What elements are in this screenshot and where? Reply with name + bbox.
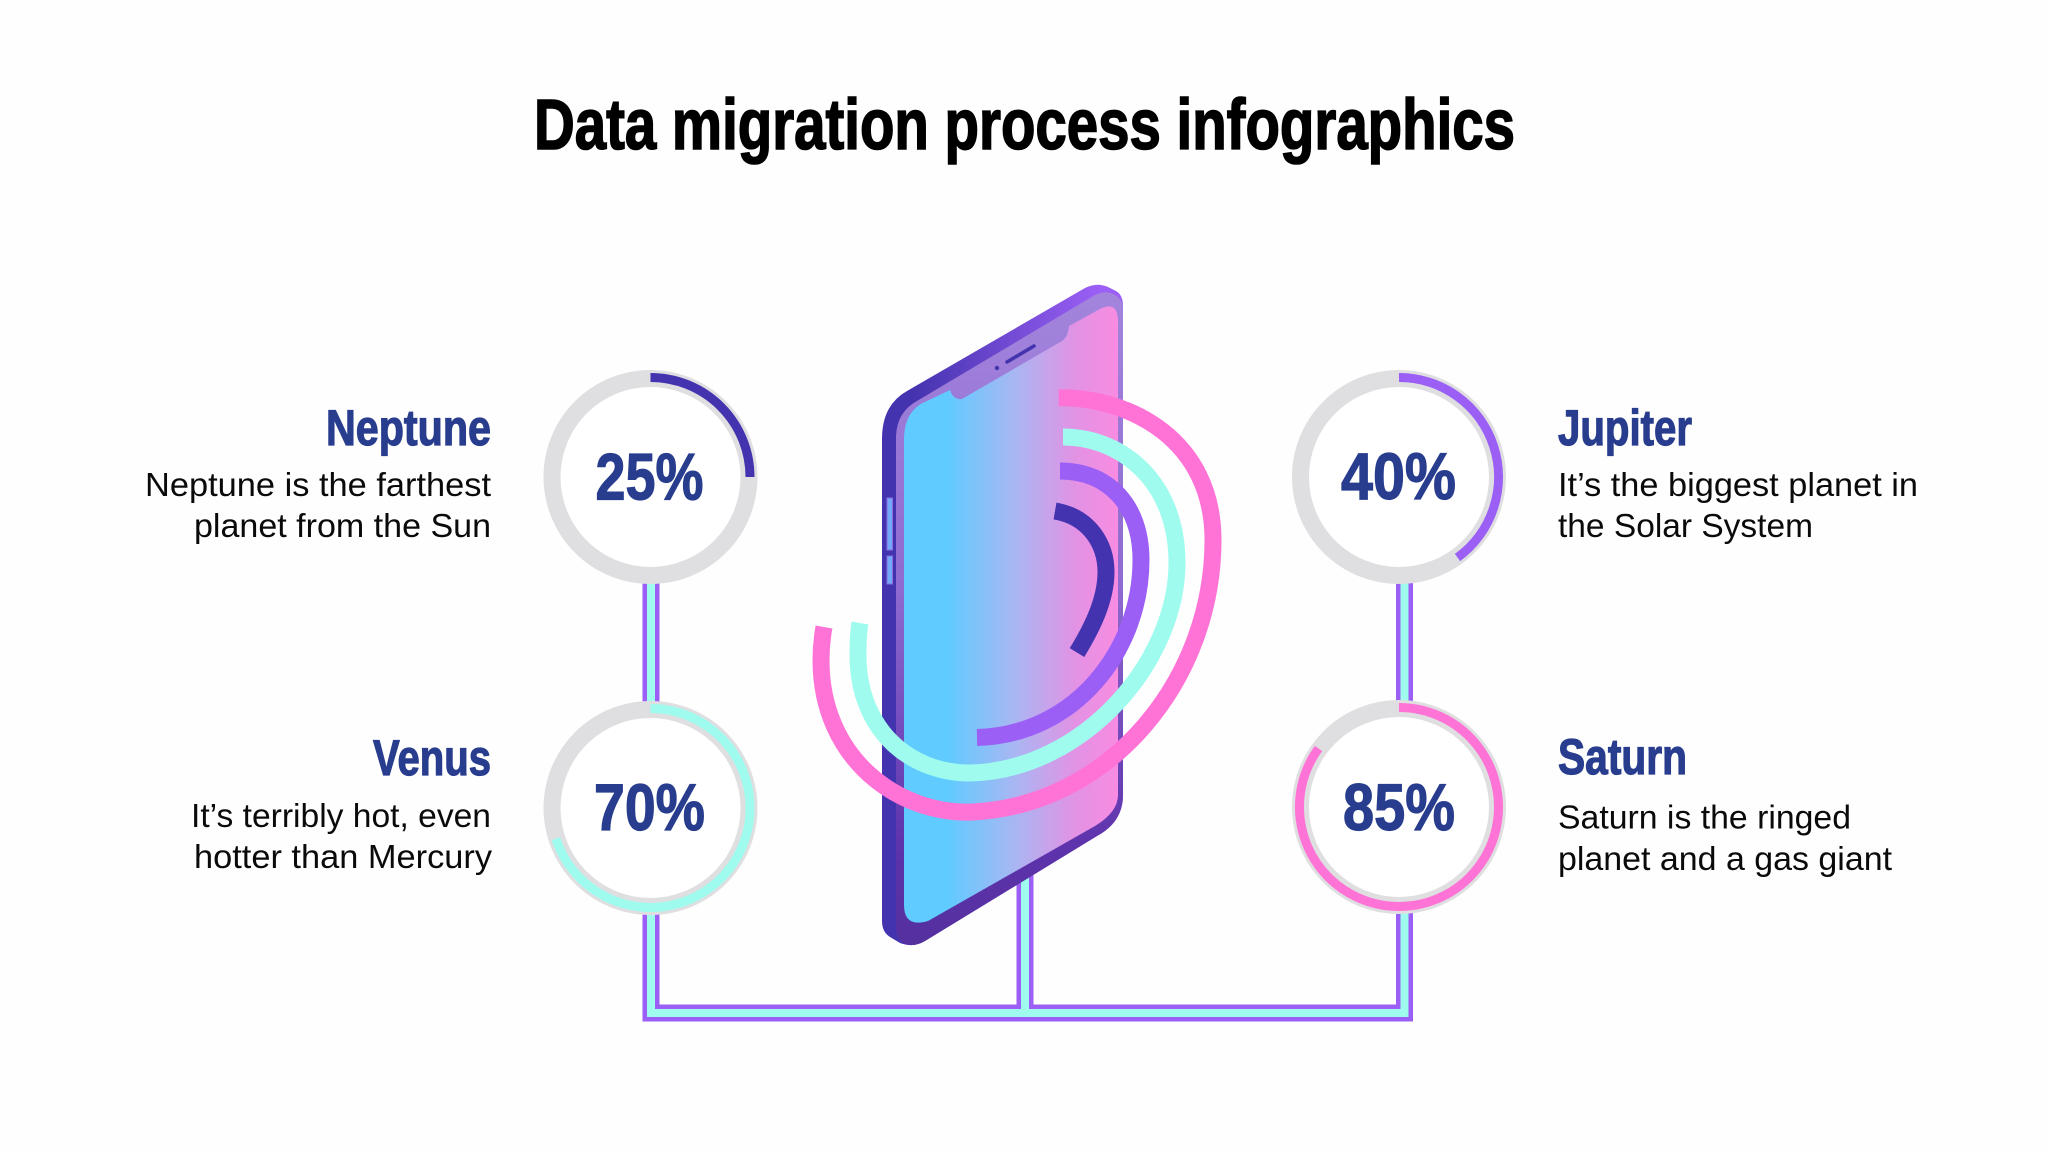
text block: Neptune <box>145 400 491 544</box>
text block: Venus <box>191 730 493 875</box>
text block: Neptune: Neptune is the farthest <box>145 466 491 503</box>
text block: Neptune: Neptune <box>326 400 491 456</box>
text block: Saturn: Saturn is the ringed <box>1558 798 1851 836</box>
text block: Jupiter <box>1558 400 1918 544</box>
text block: Venus: It’s terribly hot, even <box>191 797 491 834</box>
gauge: Saturn 85%: 85% <box>1343 770 1455 844</box>
phone illustration <box>882 285 1123 945</box>
text block: Jupiter: It’s the biggest planet in <box>1558 466 1918 503</box>
gauge: Neptune 25%: 25% <box>596 440 704 514</box>
title: Data migration process infographics <box>534 86 1515 165</box>
arc: pink <box>821 398 1213 812</box>
text block: Saturn: planet and a gas giant <box>1558 840 1892 877</box>
gauge: Saturn 85% <box>1299 708 1498 906</box>
gauge: Neptune 25% <box>552 377 750 576</box>
arc: purple <box>977 471 1141 738</box>
phone front plate <box>896 292 1123 945</box>
phone body <box>882 285 1123 945</box>
text block: Saturn: Saturn <box>1558 729 1687 785</box>
arc: indigo <box>1055 511 1106 653</box>
gauge: Jupiter 40% <box>1300 378 1499 576</box>
arc: cyan <box>858 437 1177 773</box>
connector lines <box>651 560 1404 1013</box>
phone camera <box>995 366 999 370</box>
phone speaker <box>1007 346 1034 362</box>
text block: Jupiter: the Solar System <box>1558 507 1813 544</box>
signal arcs <box>821 398 1213 812</box>
text block: Neptune: planet from the Sun <box>194 507 491 544</box>
gauge: Jupiter 40%: 40% <box>1341 439 1456 513</box>
text block: Venus: hotter than Mercury <box>194 838 493 875</box>
phone side buttons <box>887 498 892 584</box>
gauge: Venus 70%: 70% <box>594 770 705 844</box>
text block: Jupiter: Jupiter <box>1558 400 1692 456</box>
phone screen <box>904 306 1118 923</box>
text block: Venus: Venus <box>373 730 491 786</box>
text block: Saturn <box>1558 729 1892 877</box>
gauge: Venus 70% <box>552 708 750 908</box>
